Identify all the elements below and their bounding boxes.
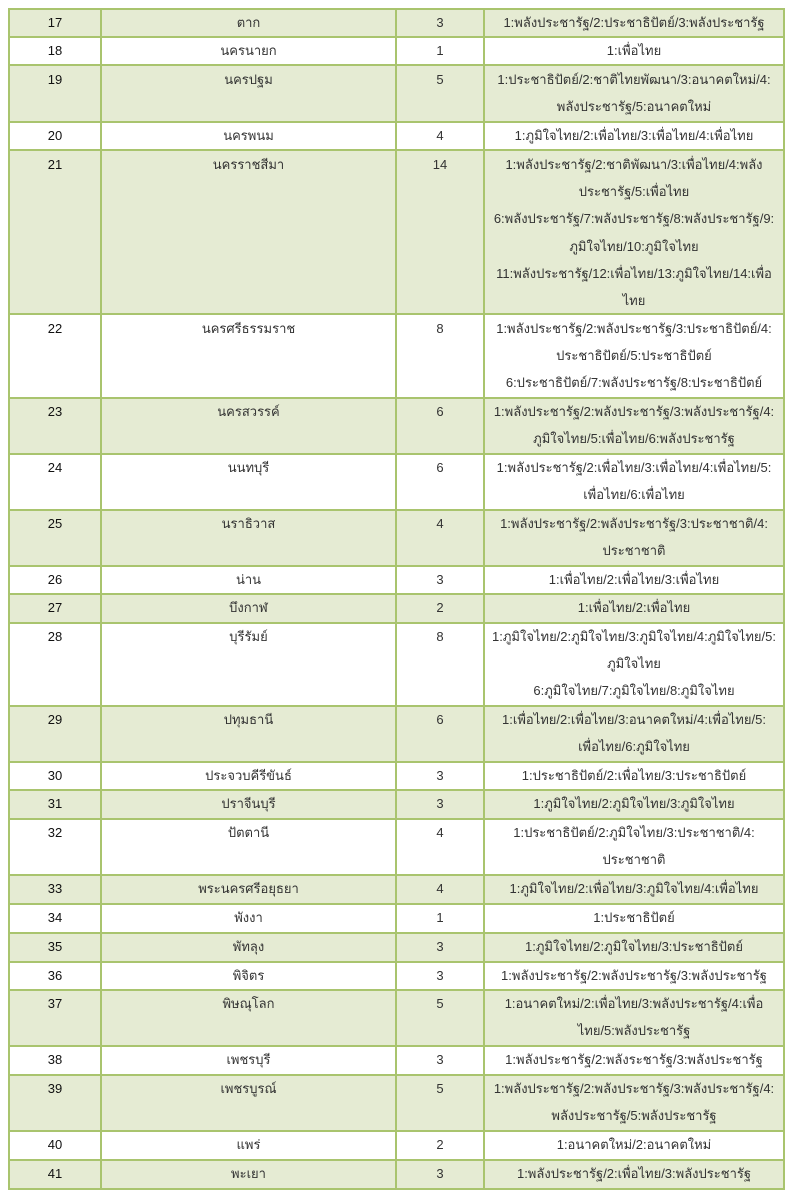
row 18 xyxy=(8,36,785,66)
row 20: 1:ภูมิใจไทย/2:เพื่อไทย/3:เพื่อไทย/4:เพื่อไทย xyxy=(515,128,753,143)
row 35: 35 xyxy=(48,939,62,954)
row 25: นราธิวาส xyxy=(222,516,275,531)
row 39: 5 xyxy=(436,1081,444,1096)
row 30: 3 xyxy=(436,768,444,783)
row 30 xyxy=(8,761,785,791)
row 17: 17 xyxy=(48,15,62,30)
row 36: 3 xyxy=(436,968,444,983)
row 34 xyxy=(8,903,785,934)
row 23: นครสวรรค์ xyxy=(217,404,280,419)
row 33: 1:ภูมิใจไทย/2:เพื่อไทย/3:ภูมิใจไทย/4:เพื่อไทย xyxy=(510,881,758,896)
row 38 xyxy=(8,1045,785,1076)
row 31: ปราจีนบุรี xyxy=(221,796,276,811)
row 28: 8 xyxy=(436,629,444,644)
row 22 xyxy=(8,313,785,399)
row 28: 6:ภูมิใจไทย/7:ภูมิใจไทย/8:ภูมิใจไทย xyxy=(533,683,735,698)
row 22: 8 xyxy=(436,321,444,336)
row 40: 1:อนาคตใหม่/2:อนาคตใหม่ xyxy=(557,1137,711,1152)
row 19: นครปฐม xyxy=(224,72,273,87)
row 35: พัทลุง xyxy=(233,939,264,954)
row 40: 2 xyxy=(436,1137,444,1152)
row 27: 1:เพื่อไทย/2:เพื่อไทย xyxy=(578,600,690,615)
row 24: นนทบุรี xyxy=(228,460,269,475)
row 17 xyxy=(8,8,785,38)
row 21: ประชารัฐ/5:เพื่อไทย xyxy=(579,184,689,199)
row 41: 41 xyxy=(48,1166,62,1181)
row 41 xyxy=(8,1159,785,1190)
row 32: ปัตตานี xyxy=(228,825,269,840)
row 30: ประจวบคีรีขันธ์ xyxy=(205,768,292,783)
row 40 xyxy=(8,1130,785,1161)
row 35 xyxy=(8,932,785,963)
row 23 xyxy=(8,397,785,455)
row 37: ไทย/5:พลังประชารัฐ xyxy=(578,1023,690,1038)
row 25: 25 xyxy=(48,516,62,531)
row 22: 1:พลังประชารัฐ/2:พลังประชารัฐ/3:ประชาธิปัตย์/4: xyxy=(496,321,772,336)
row 29 xyxy=(8,705,785,763)
row 28: 1:ภูมิใจไทย/2:ภูมิใจไทย/3:ภูมิใจไทย/4:ภูมิใจไทย/5: xyxy=(492,629,776,644)
row 32: 4 xyxy=(436,825,444,840)
row 35: 3 xyxy=(436,939,444,954)
row 32: 1:ประชาธิปัตย์/2:ภูมิใจไทย/3:ประชาชาติ/4: xyxy=(513,825,755,840)
row 37 xyxy=(8,989,785,1047)
row 18: 18 xyxy=(48,43,62,58)
row 39: พลังประชารัฐ/5:พลังประชารัฐ xyxy=(551,1108,717,1123)
row 38: 38 xyxy=(48,1052,62,1067)
row 30: 30 xyxy=(48,768,62,783)
row 22: ประชาธิปัตย์/5:ประชาธิปัตย์ xyxy=(556,348,712,363)
row 36: 36 xyxy=(48,968,62,983)
row 30: 1:ประชาธิปัตย์/2:เพื่อไทย/3:ประชาธิปัตย์ xyxy=(522,768,746,783)
row 39 xyxy=(8,1074,785,1132)
row 18: นครนายก xyxy=(220,43,277,58)
row 24: เพื่อไทย/6:เพื่อไทย xyxy=(583,487,685,502)
row 26 xyxy=(8,565,785,595)
row 21: ภูมิใจไทย/10:ภูมิใจไทย xyxy=(569,239,699,254)
row 24: 24 xyxy=(48,460,62,475)
row 29: เพื่อไทย/6:ภูมิใจไทย xyxy=(578,739,690,754)
row 25: 1:พลังประชารัฐ/2:พลังประชารัฐ/3:ประชาชาติ/4: xyxy=(500,516,768,531)
row 38: เพชรบุรี xyxy=(226,1052,271,1067)
row 17: 1:พลังประชารัฐ/2:ประชาธิปัตย์/3:พลังประชารัฐ xyxy=(503,15,765,30)
row 31: 1:ภูมิใจไทย/2:ภูมิใจไทย/3:ภูมิใจไทย xyxy=(533,796,735,811)
row 18: 1:เพื่อไทย xyxy=(607,43,661,58)
row 25: 4 xyxy=(436,516,444,531)
row 20: นครพนม xyxy=(223,128,274,143)
row 19: 1:ประชาธิปัตย์/2:ชาติไทยพัฒนา/3:อนาคตใหม่/4: xyxy=(497,72,771,87)
row 28: ภูมิใจไทย xyxy=(607,656,661,671)
row 24: 6 xyxy=(436,460,444,475)
row 34: 34 xyxy=(48,910,62,925)
row 39: เพชรบูรณ์ xyxy=(220,1081,277,1096)
row 28: บุรีรัมย์ xyxy=(229,629,268,644)
row 23: 23 xyxy=(48,404,62,419)
row 21: 21 xyxy=(48,157,62,172)
row 20 xyxy=(8,121,785,151)
row 41: 1:พลังประชารัฐ/2:เพื่อไทย/3:พลังประชารัฐ xyxy=(517,1166,751,1181)
row 35: 1:ภูมิใจไทย/2:ภูมิใจไทย/3:ประชาธิปัตย์ xyxy=(525,939,743,954)
row 32 xyxy=(8,818,785,876)
row 37: 1:อนาคตใหม่/2:เพื่อไทย/3:พลังประชารัฐ/4:เพื่อ xyxy=(505,996,763,1011)
row 31: 31 xyxy=(48,796,62,811)
row 21: นครราชสีมา xyxy=(213,157,284,172)
row 25 xyxy=(8,509,785,567)
row 25: ประชาชาติ xyxy=(603,543,665,558)
row 37: พิษณุโลก xyxy=(222,996,275,1011)
row 32: 32 xyxy=(48,825,62,840)
row 34: 1:ประชาธิปัตย์ xyxy=(593,910,675,925)
row 22: 22 xyxy=(48,321,62,336)
row 36 xyxy=(8,961,785,991)
row 29: 1:เพื่อไทย/2:เพื่อไทย/3:อนาคตใหม่/4:เพื่อไทย/5: xyxy=(502,712,766,727)
row 27: 2 xyxy=(436,600,444,615)
row 19: 19 xyxy=(48,72,62,87)
row 20: 4 xyxy=(436,128,444,143)
row 19: พลังประชารัฐ/5:อนาคตใหม่ xyxy=(557,99,711,114)
row 33 xyxy=(8,874,785,905)
row 17: ตาก xyxy=(237,15,260,30)
row 18: 1 xyxy=(436,43,444,58)
row 22: นครศรีธรรมราช xyxy=(202,321,295,336)
row 40: 40 xyxy=(48,1137,62,1152)
row 34: 1 xyxy=(436,910,444,925)
row 33: 33 xyxy=(48,881,62,896)
row 33: 4 xyxy=(436,881,444,896)
row 34: พังงา xyxy=(234,910,263,925)
row 21: 1:พลังประชารัฐ/2:ชาติพัฒนา/3:เพื่อไทย/4:พลัง xyxy=(505,157,763,172)
row 36: 1:พลังประชารัฐ/2:พลังประชารัฐ/3:พลังประชารัฐ xyxy=(501,968,767,983)
row 27: บึงกาฬ xyxy=(229,600,268,615)
row 17: 3 xyxy=(436,15,444,30)
row 38: 3 xyxy=(436,1052,444,1067)
row 28 xyxy=(8,622,785,707)
row 20: 20 xyxy=(48,128,62,143)
row 31 xyxy=(8,789,785,820)
row 21: 11:พลังประชารัฐ/12:เพื่อไทย/13:ภูมิใจไทย/14:เพื่อ xyxy=(496,266,772,281)
row 19 xyxy=(8,64,785,123)
row 27 xyxy=(8,593,785,624)
row 19: 5 xyxy=(436,72,444,87)
row 26: น่าน xyxy=(236,572,261,587)
row 37: 5 xyxy=(436,996,444,1011)
row 29: 6 xyxy=(436,712,444,727)
row 21: ไทย xyxy=(623,293,645,308)
row 33: พระนครศรีอยุธยา xyxy=(198,881,299,896)
row 23: 6 xyxy=(436,404,444,419)
row 39: 1:พลังประชารัฐ/2:พลังประชารัฐ/3:พลังประชารัฐ/4: xyxy=(494,1081,774,1096)
row 21: 14 xyxy=(433,157,447,172)
row 39: 39 xyxy=(48,1081,62,1096)
row 21: 6:พลังประชารัฐ/7:พลังประชารัฐ/8:พลังประชารัฐ/9: xyxy=(494,211,774,226)
row 22: 6:ประชาธิปัตย์/7:พลังประชารัฐ/8:ประชาธิปัตย์ xyxy=(506,375,762,390)
row 37: 37 xyxy=(48,996,62,1011)
row 28: 28 xyxy=(48,629,62,644)
row 32: ประชาชาติ xyxy=(603,852,665,867)
row 31: 3 xyxy=(436,796,444,811)
row 21 xyxy=(8,149,785,315)
row 23: 1:พลังประชารัฐ/2:พลังประชารัฐ/3:พลังประชารัฐ/4: xyxy=(494,404,774,419)
row 41: พะเยา xyxy=(231,1166,266,1181)
row 24: 1:พลังประชารัฐ/2:เพื่อไทย/3:เพื่อไทย/4:เพื่อไทย/5: xyxy=(497,460,771,475)
row 24 xyxy=(8,453,785,511)
row 29: 29 xyxy=(48,712,62,727)
row 23: ภูมิใจไทย/5:เพื่อไทย/6:พลังประชารัฐ xyxy=(533,431,735,446)
row 29: ปทุมธานี xyxy=(224,712,273,727)
row 36: พิจิตร xyxy=(233,968,264,983)
row 40: แพร่ xyxy=(237,1137,260,1152)
row 27: 27 xyxy=(48,600,62,615)
row 41: 3 xyxy=(436,1166,444,1181)
row 26: 26 xyxy=(48,572,62,587)
row 26: 3 xyxy=(436,572,444,587)
row 38: 1:พลังประชารัฐ/2:พลังระชารัฐ/3:พลังประชารัฐ xyxy=(505,1052,763,1067)
row 26: 1:เพื่อไทย/2:เพื่อไทย/3:เพื่อไทย xyxy=(549,572,719,587)
